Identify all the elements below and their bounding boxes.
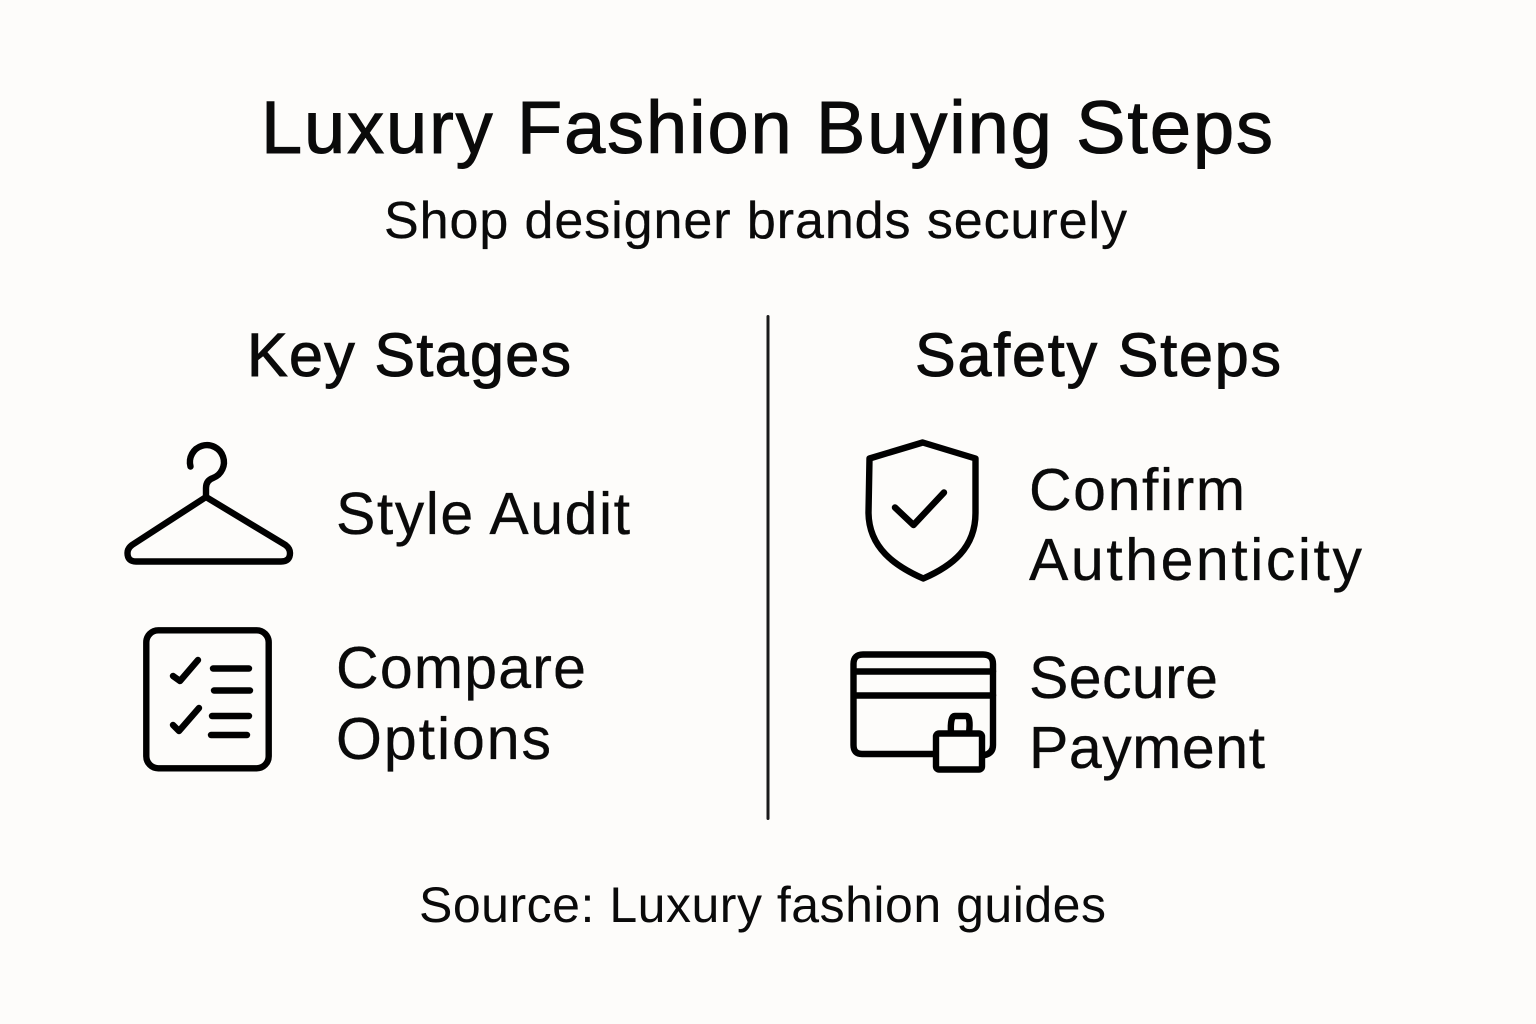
label: secure payment	[1029, 645, 1265, 781]
heading: key stages: Key Stages	[247, 321, 571, 389]
icon: checklist	[146, 630, 269, 768]
title: Luxury Fashion Buying Steps	[261, 86, 1273, 169]
label: compare options: Compare	[336, 635, 586, 701]
icon: shield with check	[868, 442, 976, 578]
panel: key stages	[128, 321, 630, 772]
icon: clothes hanger	[128, 445, 290, 562]
label: confirm authenticity: Authenticity	[1029, 527, 1362, 593]
source note: Source: Luxury fashion guides	[419, 877, 1106, 933]
icon: card with padlock	[854, 654, 993, 770]
heading: safety steps: Safety Steps	[915, 321, 1281, 389]
label: confirm authenticity: Confirm	[1029, 457, 1245, 523]
label: secure payment: Payment	[1029, 715, 1265, 781]
label: compare options: Options	[336, 706, 551, 772]
label: confirm authenticity	[1029, 457, 1362, 593]
label: style audit: Style Audit	[336, 481, 630, 547]
label: secure payment: Secure	[1029, 645, 1218, 711]
subtitle: Shop designer brands securely	[384, 192, 1127, 250]
label: compare options	[336, 635, 586, 772]
panel: safety steps	[854, 321, 1362, 781]
